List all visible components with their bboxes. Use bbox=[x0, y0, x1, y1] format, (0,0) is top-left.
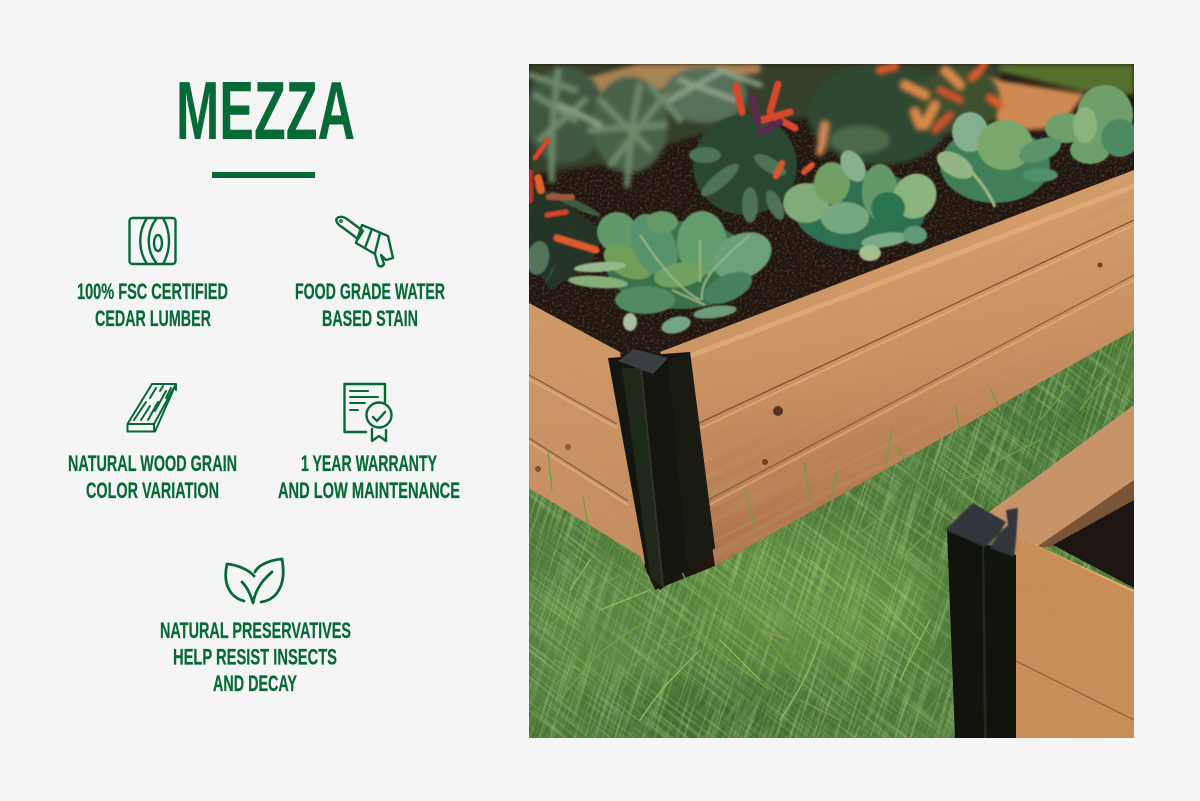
plant: front cabbage bbox=[568, 206, 779, 337]
feature: FSC certified cedar bbox=[77, 218, 228, 331]
label: 100% FSC certified cedar lumber: CEDAR LUMBER bbox=[95, 306, 211, 331]
plant: left red peppers bbox=[524, 140, 605, 291]
cap bbox=[945, 503, 1018, 557]
wooden wall: right side bbox=[660, 170, 1134, 566]
label: 100% FSC certified cedar lumber bbox=[77, 279, 228, 331]
label: food grade water based stain bbox=[295, 279, 445, 331]
icon: two leaves bbox=[226, 559, 283, 603]
icon: warranty certificate bbox=[344, 384, 392, 441]
black corner post bbox=[608, 349, 715, 590]
post cap bbox=[618, 349, 668, 374]
label: natural preservatives help resist insects and decay: NATURAL PRESERVATIVES bbox=[160, 618, 351, 643]
grass blades bbox=[540, 370, 1110, 720]
post bbox=[947, 530, 1016, 738]
feature: food grade stain bbox=[295, 217, 445, 331]
plant: right cabbage bbox=[932, 112, 1064, 207]
plant: far right cabbage bbox=[1045, 85, 1139, 164]
title: MEZZA bbox=[176, 64, 355, 157]
plant: orange pepper plant right bbox=[808, 64, 1000, 165]
label: 100% FSC certified cedar lumber: 100% FSC CERTIFIED bbox=[77, 279, 228, 304]
herbs bbox=[525, 67, 760, 185]
grass lawn bbox=[510, 330, 1134, 738]
wooden wall: left side bbox=[529, 303, 645, 565]
label: food grade water based stain: BASED STAIN bbox=[322, 306, 418, 331]
label: natural wood grain color variation: NATURAL WOOD GRAIN bbox=[68, 451, 237, 476]
feature: warranty bbox=[278, 384, 460, 503]
label: natural wood grain color variation bbox=[68, 451, 237, 503]
label: natural preservatives help resist insects and decay: HELP RESIST INSECTS bbox=[173, 644, 337, 670]
plant: pepper plant centre bbox=[689, 84, 812, 223]
panel: photo of raised garden bed bbox=[510, 64, 1160, 750]
feature: natural preservatives bbox=[160, 559, 351, 696]
label: natural preservatives help resist insects and decay: AND DECAY bbox=[213, 671, 297, 696]
feature: natural wood grain bbox=[68, 384, 237, 503]
plant: centre cabbage bbox=[783, 146, 945, 261]
soil bbox=[1053, 500, 1134, 588]
second raised bed bbox=[945, 405, 1134, 738]
icon: wood cross-section bbox=[130, 218, 176, 264]
background rim and lawn bbox=[529, 64, 1134, 175]
far wall bbox=[985, 405, 1134, 548]
label: natural preservatives help resist insects and decay bbox=[160, 618, 351, 696]
icon: paint brush bbox=[336, 217, 393, 266]
label: 1 year warranty and low maintenance bbox=[278, 451, 460, 503]
icon: wood plank bbox=[128, 384, 176, 432]
title divider bbox=[212, 172, 315, 178]
label: 1 year warranty and low maintenance: AND LOW MAINTENANCE bbox=[278, 478, 460, 503]
label: food grade water based stain: FOOD GRADE WATER bbox=[295, 279, 445, 304]
label: natural wood grain color variation: COLOR VARIATION bbox=[86, 478, 219, 503]
near wall bbox=[1014, 535, 1134, 738]
label: 1 year warranty and low maintenance: 1 YEAR WARRANTY bbox=[301, 451, 437, 476]
